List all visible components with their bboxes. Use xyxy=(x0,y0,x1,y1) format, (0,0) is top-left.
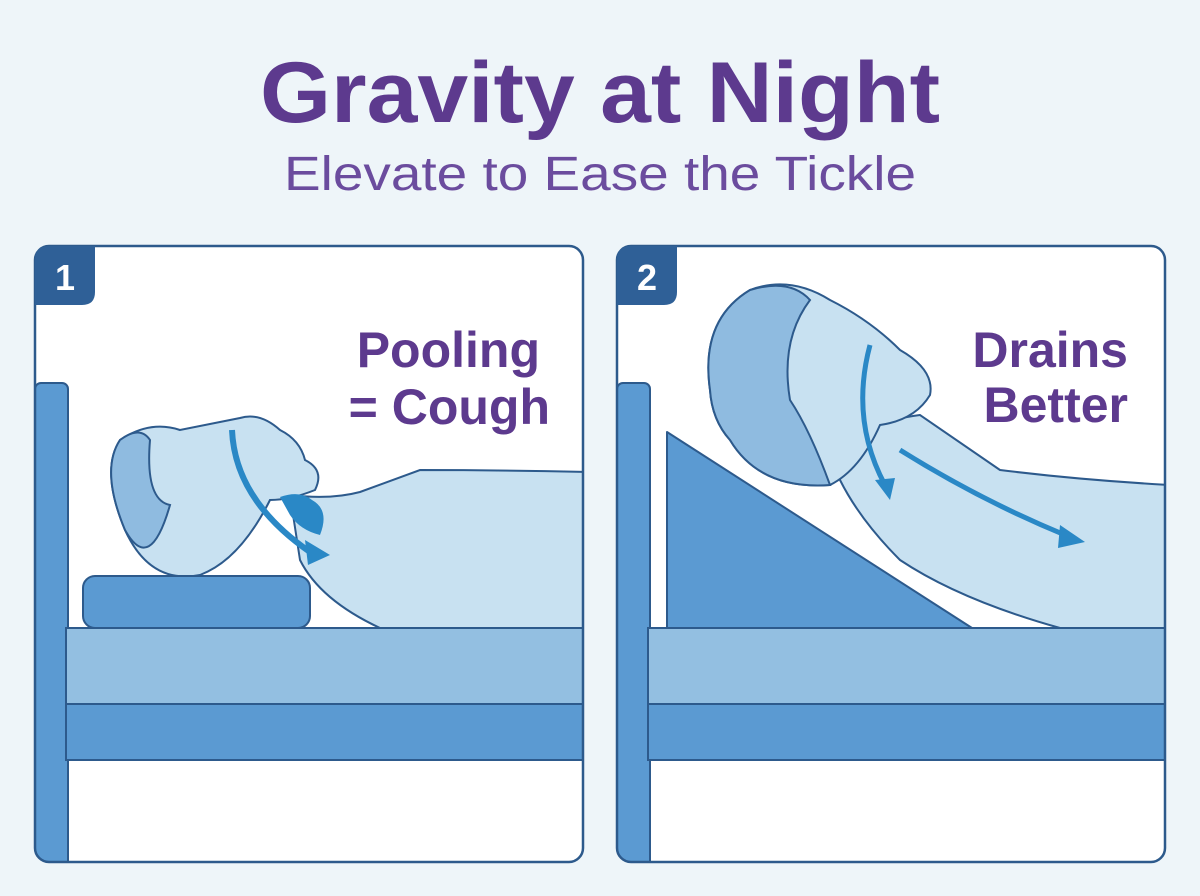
panel 2: elevated drains xyxy=(617,246,1170,873)
badge 1 xyxy=(35,246,95,305)
body xyxy=(840,415,1170,628)
mattress xyxy=(648,628,1168,704)
badge 2: 2 xyxy=(637,257,657,298)
label: pooling = cough: Pooling xyxy=(357,322,540,378)
head xyxy=(111,416,318,577)
panel 1: flat pooling xyxy=(35,246,590,873)
head xyxy=(708,284,931,485)
bed frame xyxy=(648,704,1168,760)
pillow xyxy=(83,576,310,628)
headboard xyxy=(35,383,68,873)
label: drains better: Better xyxy=(984,377,1128,433)
label: drains better xyxy=(972,322,1128,433)
title: Gravity at Night xyxy=(260,45,940,141)
mattress xyxy=(66,628,586,704)
bed frame xyxy=(66,704,586,760)
label: drains better: Drains xyxy=(972,322,1128,378)
headboard xyxy=(617,383,650,873)
label: pooling = cough: = Cough xyxy=(349,379,550,435)
label: pooling = cough xyxy=(349,322,550,435)
body xyxy=(290,470,590,628)
badge 2 xyxy=(617,246,677,305)
wedge xyxy=(667,432,972,628)
subtitle: Elevate to Ease the Tickle xyxy=(284,148,916,201)
badge 1: 1 xyxy=(55,257,75,298)
pooling mucus and arrow xyxy=(280,494,324,535)
drain arrows xyxy=(863,345,885,485)
